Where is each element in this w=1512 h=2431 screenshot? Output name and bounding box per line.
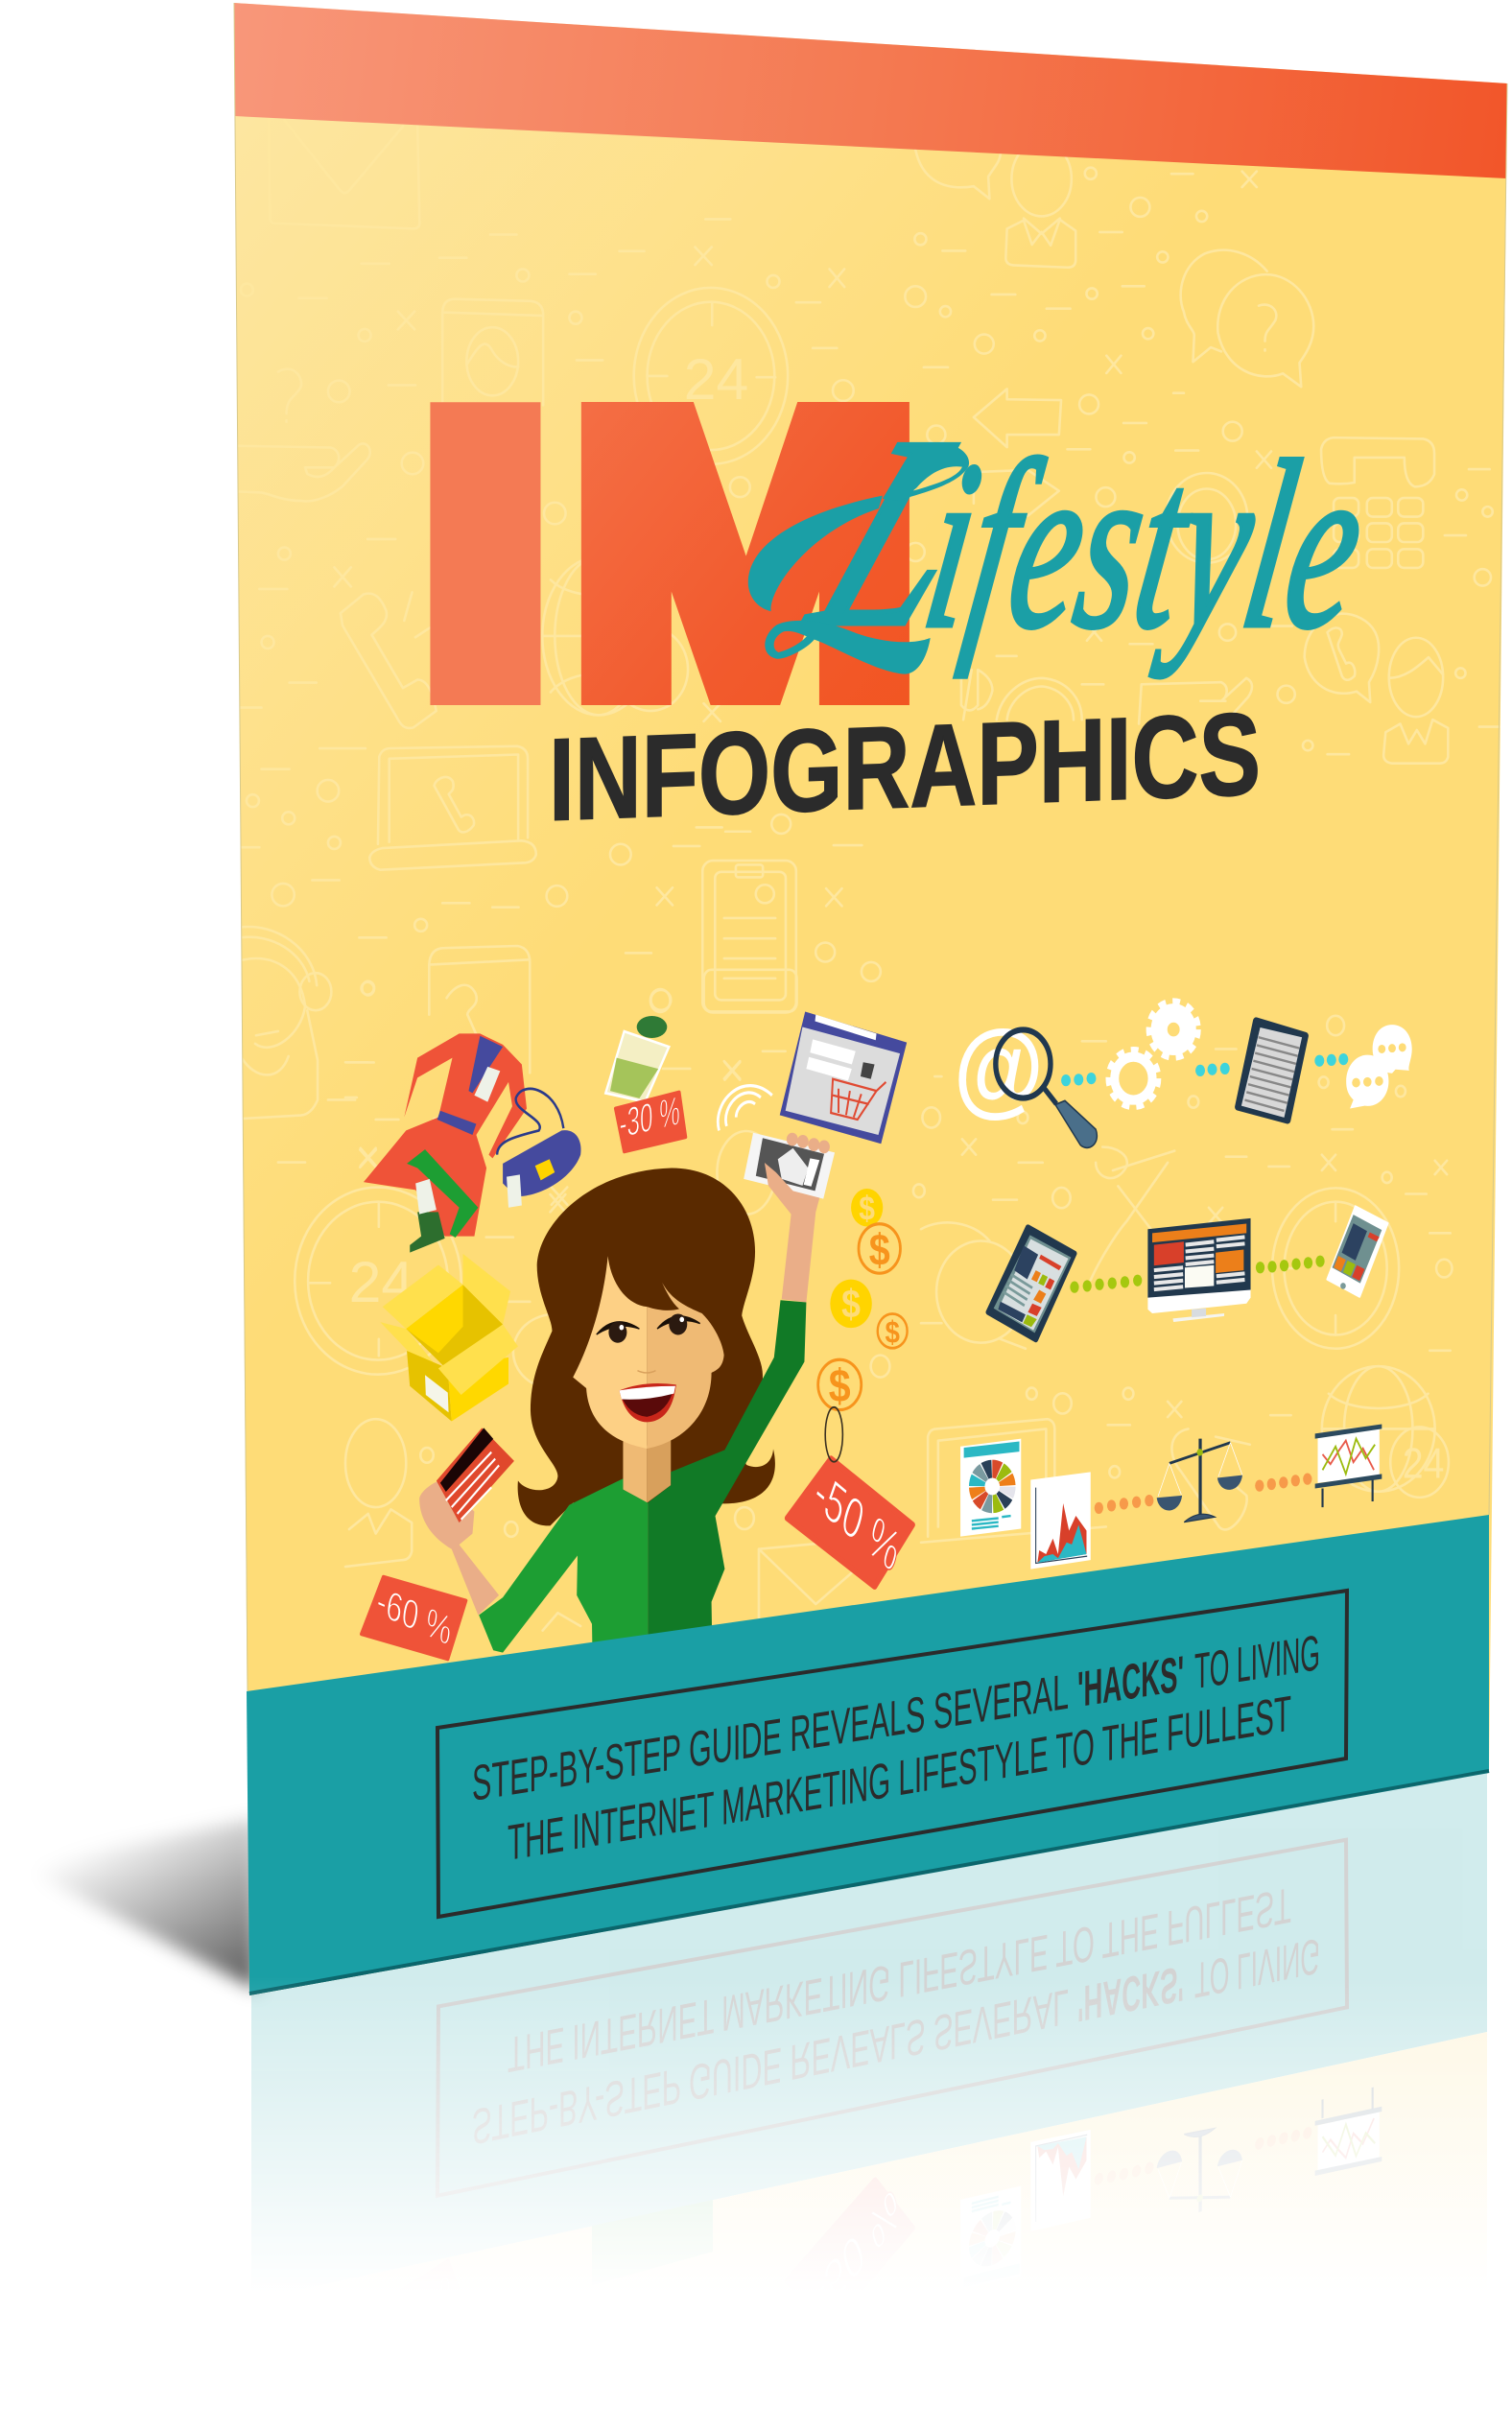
tag: minus 50 percent: -50 % [808, 1459, 907, 1585]
drop shadow behind the page [19, 1818, 257, 1991]
page background [234, 3, 1507, 1995]
background doodle pattern: 24 [349, 1249, 413, 1314]
icon: presentation board [1315, 1425, 1382, 1507]
script L flourishes [748, 443, 969, 674]
icon: balance scales [1157, 1439, 1242, 1522]
icon: speech bubbles [1346, 1025, 1412, 1109]
reflected yellow area [713, 2032, 1487, 2202]
mirrored reflection of the cover's lower part [251, 1773, 1487, 2237]
woman: hair [518, 1168, 775, 1525]
tag: minus 50 percent [788, 1407, 912, 1587]
background doodle pattern: 24 [1403, 1439, 1444, 1487]
book cover page [234, 3, 1507, 1995]
icon: perfume bottle [605, 1016, 669, 1102]
title Lifestyle script [748, 381, 1380, 684]
bottom teal band [247, 1515, 1489, 1995]
icon: dollar coins: $ [829, 1361, 851, 1412]
icon: credit card [437, 1428, 514, 1522]
dots: orange connectors [1095, 1474, 1311, 1514]
subtitle INFOGRAPHICS: INFOGRAPHICS [549, 689, 1261, 845]
woman: neck [623, 1437, 671, 1502]
right illustration: device flows [954, 1002, 1412, 1339]
woman: face [573, 1256, 724, 1449]
woman: right arm and hand with phone [744, 1133, 835, 1303]
tagline line one: TO LIVING [1194, 1625, 1320, 1700]
icon: handbag [497, 1089, 581, 1208]
icon: desktop monitor [1147, 1218, 1251, 1322]
title IM [379, 307, 919, 799]
icon: e-reader tablet [1238, 1021, 1306, 1121]
tagline box outline [437, 1591, 1347, 1917]
woman: green sweater [479, 1300, 806, 1670]
woman: left arm and hand [419, 1480, 499, 1616]
tagline line one: 'HACKS' [1077, 1646, 1184, 1718]
reflection fade to white [221, 1765, 1512, 2431]
icon: at sign with magnifier: @ [954, 1008, 1044, 1126]
title IM: I [379, 307, 592, 799]
left illustration: woman shopping [362, 1011, 912, 1670]
page bottom edge [249, 1771, 1489, 1994]
tag: minus 60 percent: -60 % [373, 1576, 455, 1654]
icon: gears [1108, 1002, 1198, 1107]
tagline box and text [437, 1591, 1347, 1917]
icon: dollar coins: $ [841, 1283, 861, 1327]
icon: open yellow box [380, 1254, 518, 1421]
tagline line one: STEP-BY-STEP GUIDE REVEALS SEVERAL [472, 1664, 1069, 1812]
card: area chart [1030, 1472, 1091, 1570]
top red band [234, 3, 1507, 178]
card: pie report [960, 1439, 1021, 1537]
background doodle pattern [239, 118, 1500, 1631]
icon: dollar coins: $ [859, 1191, 875, 1227]
icon: dress with tag [364, 1033, 527, 1253]
reflected teal band [251, 1773, 1487, 2237]
icon: dollar coins [818, 1189, 908, 1412]
dots: green connectors [1070, 1256, 1325, 1293]
icon: dollar coins: $ [869, 1226, 890, 1275]
title Lifestyle script: L [776, 381, 1021, 684]
icon: at sign with magnifier [954, 1008, 1097, 1147]
background doodle pattern: 24 [684, 346, 748, 412]
title IM: M [572, 336, 919, 771]
page edges [234, 3, 1507, 1691]
icon: dollar coins: $ [885, 1315, 900, 1350]
right illustration: chart row [960, 1425, 1382, 1570]
icon: wifi arcs [718, 1086, 772, 1130]
tag: minus 30 percent: -30 % [619, 1088, 680, 1147]
icon: browser window with cart [780, 1011, 907, 1144]
reflected tagline and illustrations [436, 1838, 1470, 2237]
tag: minus 30 percent [616, 1088, 686, 1151]
dots: cyan connectors [1061, 1053, 1348, 1086]
icon: tablet layout [988, 1227, 1075, 1339]
icon: smartphone [1328, 1207, 1387, 1296]
